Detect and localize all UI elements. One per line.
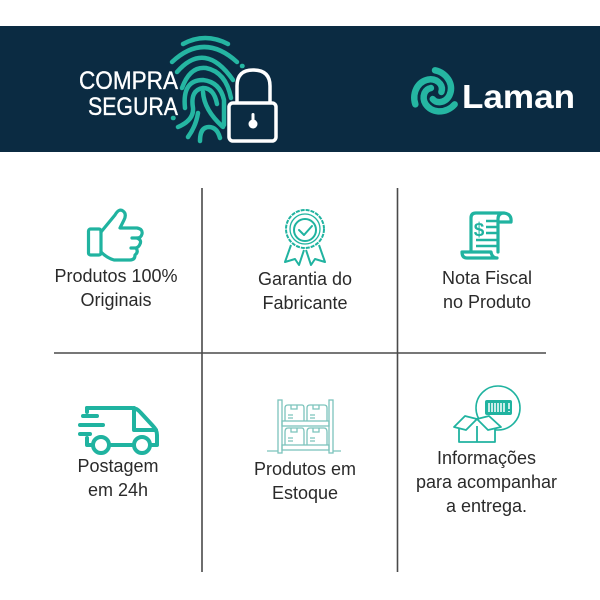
header banner xyxy=(0,26,600,152)
text: informacoes para acompanhar a entrega: para acompanhar xyxy=(416,472,557,492)
icon: warehouse shelf xyxy=(267,400,341,453)
icon: open box with barcode xyxy=(454,386,520,442)
icon: receipt scroll: $ xyxy=(474,220,485,241)
text: postagem em 24h: em 24h xyxy=(88,480,148,500)
text: informacoes para acompanhar a entrega: a entrega. xyxy=(446,496,527,516)
panel: produtos em estoque xyxy=(254,400,356,503)
icon: ribbon badge xyxy=(285,210,325,265)
title: compra segura: SEGURA xyxy=(88,93,178,121)
text: nota fiscal no produto xyxy=(442,268,532,312)
text: garantia do fabricante: Garantia do xyxy=(258,269,352,289)
text: produtos 100% originais: Originais xyxy=(80,290,152,310)
panel: produtos originais xyxy=(54,210,178,310)
title: compra segura: COMPRA xyxy=(79,67,178,95)
text: garantia do fabricante xyxy=(258,269,352,313)
text: informacoes para acompanhar a entrega: Informações xyxy=(437,448,536,468)
text: produtos 100% originais: Produtos 100% xyxy=(54,266,178,286)
icon: fingerprint xyxy=(172,38,242,141)
panel: postagem xyxy=(77,408,159,500)
text: produtos em estoque xyxy=(254,459,356,503)
text: nota fiscal no produto: Nota Fiscal xyxy=(442,268,532,288)
text: nota fiscal no produto: no Produto xyxy=(443,292,531,312)
logo: laman swirl xyxy=(407,70,456,118)
logo: laman wordmark: Laman xyxy=(462,78,575,115)
text: produtos 100% originais xyxy=(54,266,178,310)
text: informacoes para acompanhar a entrega xyxy=(416,448,557,516)
icon: padlock xyxy=(229,70,276,141)
panel: garantia do fabricante xyxy=(258,210,352,313)
grid lines xyxy=(54,188,546,572)
text: postagem em 24h: Postagem xyxy=(77,456,159,476)
icon: delivery van xyxy=(80,408,157,453)
title: compra segura xyxy=(79,67,178,121)
text: produtos em estoque: Produtos em xyxy=(254,459,356,479)
text: garantia do fabricante: Fabricante xyxy=(262,293,348,313)
icon: thumbs up xyxy=(88,210,142,260)
panel: informacoes xyxy=(416,386,557,516)
text: produtos em estoque: Estoque xyxy=(272,483,338,503)
text: postagem em 24h xyxy=(77,456,159,500)
panel: nota fiscal xyxy=(442,213,532,312)
